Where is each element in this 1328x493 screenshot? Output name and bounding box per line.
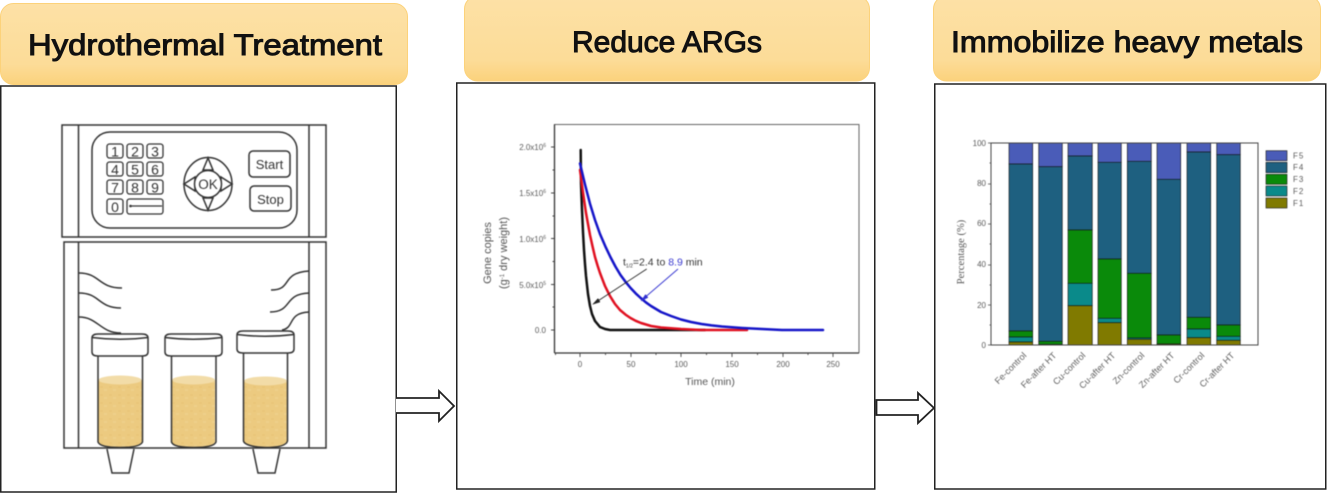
bar: Fe-control <box>1009 143 1033 345</box>
y axis title: Percentage (%) <box>956 219 967 284</box>
y axis labels: 60 <box>977 219 987 228</box>
stop button <box>250 186 291 211</box>
x axis labels: Cr-after HT <box>1198 350 1237 389</box>
legend: F5 <box>1293 152 1304 160</box>
curve: red <box>580 170 747 330</box>
direction pad with OK: OK <box>198 177 218 192</box>
y axis labels: 5.0x10 <box>519 281 543 290</box>
panel: immobilize heavy metals <box>934 0 1326 489</box>
y axis labels: 80 <box>977 179 987 188</box>
y axis labels: 6 <box>543 143 546 149</box>
axis titles: (g <box>498 279 510 289</box>
icon: control unit <box>62 125 326 237</box>
y axis labels: 5 <box>543 281 546 287</box>
y axis labels: 0 <box>982 341 987 350</box>
direction pad with OK <box>184 158 232 210</box>
tube 2 <box>165 334 222 448</box>
number keypad <box>107 144 163 215</box>
stacked bar chart: metal fractions <box>956 139 1304 391</box>
bar: Cr-control <box>1187 143 1211 345</box>
bars <box>1009 143 1240 345</box>
x axis labels: 200 <box>776 360 790 369</box>
x axis labels <box>993 350 1237 391</box>
steam lines <box>79 271 309 333</box>
heading: Immobilize heavy metals: Immobilize heavy metals <box>951 26 1303 59</box>
bar: Cu-after HT <box>1098 143 1121 345</box>
heading: Hydrothermal Treatment: Hydrothermal Treatment <box>28 29 383 62</box>
half-life annotation <box>593 256 703 304</box>
number keypad: 4 <box>111 162 119 178</box>
y axis labels: 20 <box>977 301 987 310</box>
x axis labels: 250 <box>826 360 840 369</box>
bar: Cu-control <box>1068 143 1092 345</box>
y axis labels <box>519 143 547 335</box>
legend: F1 <box>1293 199 1304 208</box>
bar: Fe-after HT <box>1039 143 1062 345</box>
x axis labels <box>578 360 840 369</box>
number keypad: 6 <box>151 162 159 178</box>
x axis labels: Cr-control <box>1171 350 1206 385</box>
heading: Hydrothermal Treatment <box>0 4 408 84</box>
legend: F3 <box>1293 175 1304 184</box>
curve: blue <box>580 164 823 330</box>
x axis labels: Cu-after HT <box>1077 350 1118 391</box>
tube 3 <box>237 331 294 473</box>
y axis labels: 100 <box>973 139 987 148</box>
half-life annotation: =2.4 to <box>633 256 668 268</box>
panel: hydrothermal treatment <box>0 4 408 492</box>
half-life annotation: 8.9 min <box>668 256 703 268</box>
y axis labels: 1.0x10 <box>519 235 543 244</box>
x axis labels: 50 <box>627 360 636 369</box>
number keypad: 5 <box>131 162 139 178</box>
legend <box>1266 151 1304 208</box>
start button <box>249 151 290 177</box>
x axis labels: 150 <box>725 360 739 369</box>
stop button: Stop <box>257 192 284 207</box>
bar: Zn-after HT <box>1157 143 1181 345</box>
y axis labels <box>973 139 987 350</box>
number keypad: 8 <box>131 180 139 196</box>
number keypad: 7 <box>111 180 119 196</box>
heading: Reduce ARGs: Reduce ARGs <box>572 26 762 59</box>
heading: Reduce ARGs <box>464 0 870 81</box>
number keypad: 1 <box>111 144 119 160</box>
arrow: hydrothermal to ARGs <box>396 391 454 421</box>
legend: F4 <box>1293 163 1304 172</box>
half-life annotation: t <box>623 256 626 268</box>
x axis labels: Fe-after HT <box>1019 350 1059 390</box>
start button: Start <box>256 157 284 172</box>
tube 1 <box>92 334 148 473</box>
x axis labels: Fe-control <box>993 350 1028 386</box>
axis titles: -1 <box>500 273 506 279</box>
number keypad: 3 <box>151 144 159 160</box>
line chart: gene copies over time <box>482 124 859 388</box>
y axis labels: 1.5x10 <box>519 189 543 198</box>
number keypad: 2 <box>131 144 139 160</box>
axis titles: Gene copies <box>482 222 494 284</box>
curve: black <box>581 150 705 330</box>
heading: Immobilize heavy metals <box>934 0 1320 81</box>
half-life annotation: 1/2 <box>626 264 633 270</box>
x axis labels: 100 <box>674 360 688 369</box>
panel: reduce ARGs <box>457 0 875 489</box>
x axis labels: Zn-after HT <box>1137 350 1177 390</box>
y axis labels: 40 <box>977 260 987 269</box>
icon: reactor chamber with tubes <box>64 242 326 473</box>
number keypad: 0 <box>111 199 119 215</box>
y axis labels: 6 <box>543 235 546 241</box>
x axis labels: Zn-control <box>1111 350 1146 386</box>
axis titles: Time (min) <box>685 376 735 388</box>
legend: F2 <box>1293 187 1304 196</box>
number keypad: 9 <box>151 180 159 196</box>
bar: Cr-after HT <box>1217 143 1240 345</box>
y axis labels: 6 <box>543 189 546 195</box>
x axis labels: 0 <box>578 360 583 369</box>
bar: Zn-control <box>1127 143 1151 345</box>
y axis labels: 2.0x10 <box>519 143 543 152</box>
axis titles: dry weight) <box>498 217 510 274</box>
x axis labels: Cu-control <box>1051 350 1087 387</box>
arrow: ARGs to heavy metals <box>876 393 934 423</box>
axis titles <box>482 217 735 388</box>
y axis labels: 0.0 <box>535 326 547 335</box>
